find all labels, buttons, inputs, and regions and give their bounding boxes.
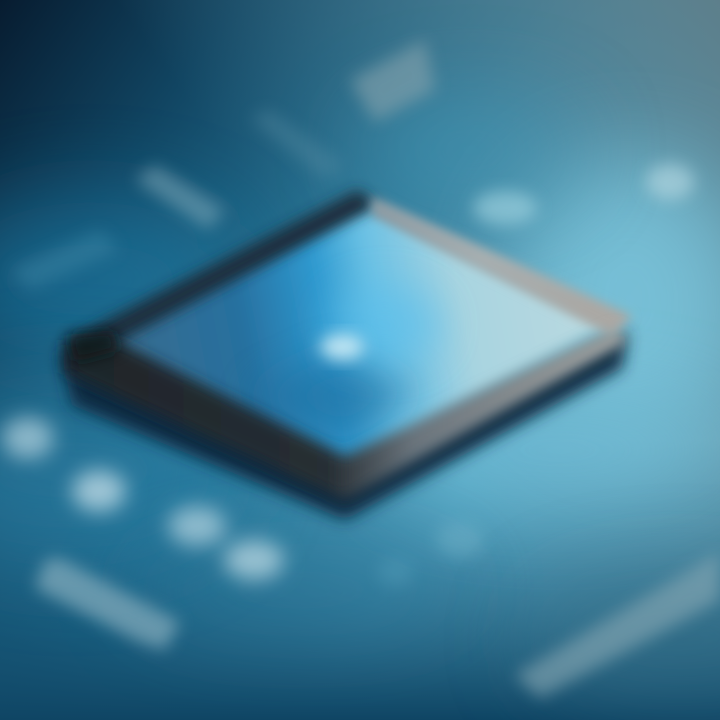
frame left corner	[68, 330, 120, 362]
tablet screen	[100, 205, 610, 470]
bottom right bar	[515, 552, 720, 698]
screen lower shade	[250, 350, 420, 445]
screen centre highlight	[320, 334, 364, 360]
tablet	[60, 190, 632, 520]
screen glow	[330, 287, 440, 363]
frame lower band	[64, 328, 628, 500]
far right label	[646, 164, 694, 200]
upper line label	[250, 110, 345, 180]
frame top-right grey edge	[372, 196, 632, 336]
far left label	[10, 230, 120, 290]
dots bottom left	[2, 417, 284, 580]
bottom left bar	[35, 558, 180, 650]
frame top-left dark edge	[68, 190, 378, 345]
right label top	[473, 191, 537, 225]
tablet shadow	[60, 330, 628, 520]
faint dots bottom centre	[436, 522, 484, 558]
top label	[350, 40, 435, 122]
left line label	[135, 165, 225, 230]
